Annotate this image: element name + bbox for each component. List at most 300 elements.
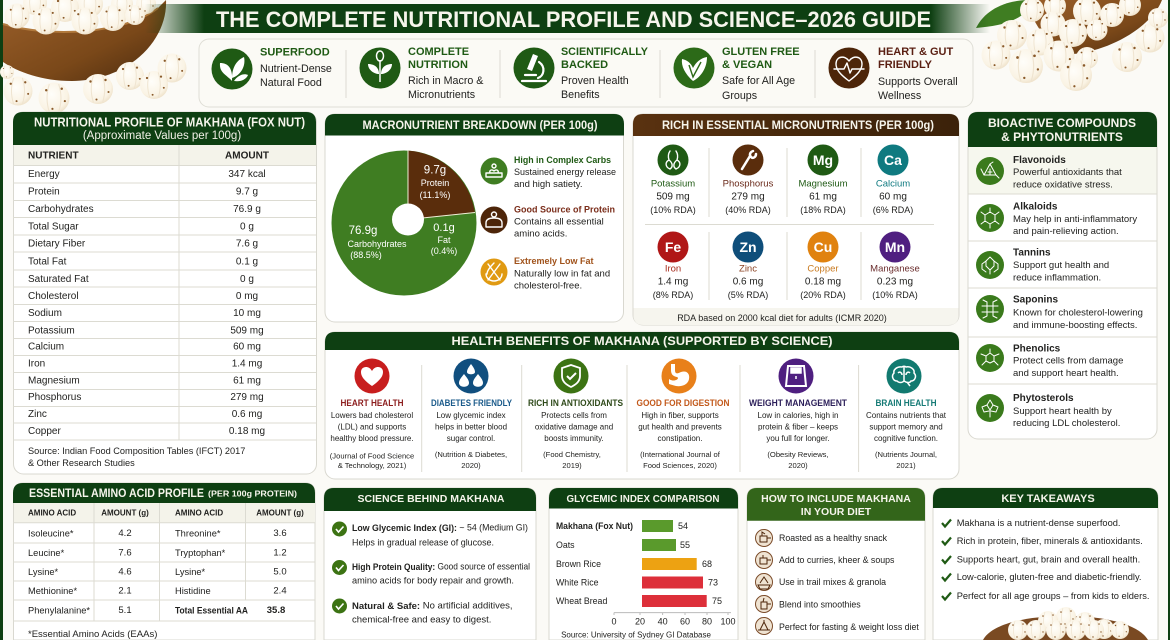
benefit: weight management: protein & fiber – keeps [758,422,838,432]
text: gluten free [722,46,800,102]
benefit: weight management: Low in calories, high in [758,411,838,420]
table rows: Total Fat [28,256,67,268]
nutrient: calcium: 60 mg [879,192,907,202]
amino table rows: 7.6 [118,548,132,558]
item: roasted snack [756,530,888,546]
nutrient: phosphorus: (40% RDA) [725,205,771,215]
chart: glycemic index bars: 20 [635,616,645,626]
item: smoothies: Blend into smoothies [779,600,861,610]
nutrient: manganese: 0.23 mg [877,276,913,288]
table rows: Saturated Fat [28,274,89,285]
table rows: Carbohydrates [28,204,94,215]
table rows: 61 mg [233,376,261,386]
table rows: 0.18 mg [229,426,265,437]
benefit: diabetes friendly [431,358,512,470]
benefit: antioxidants: RICH IN ANTIOXIDANTS [528,398,623,408]
benefit: weight management: 2020) [788,461,808,470]
nutrient: copper [800,232,846,300]
nutrient: manganese: Mn [885,239,905,255]
nutrient: magnesium: (18% RDA) [800,205,846,215]
table rows: Energy [28,169,60,180]
chart: macronutrient pie: (11.1%) [420,190,450,200]
takeaway list: Supports heart, gut, brain and overall health. [957,554,1140,564]
table rows: Iron [28,358,45,370]
compound: flavonoids: reduce oxidative stress. [1013,180,1113,190]
chart: glycemic index bars: 75 [712,596,722,606]
text: superfood [260,46,332,89]
benefit: diabetes friendly: Low glycemic index [436,411,506,420]
benefit: heart health: HEART HEALTH [340,398,404,408]
amino table rows: Leucine* [28,548,65,558]
compound: phenolics [976,344,1123,379]
feature strip [199,39,973,107]
benefit: brain health: support memory and [869,422,943,432]
heading: macronutrient breakdown: MACRONUTRIENT BREAKDOWN (PER 100g) [362,118,598,132]
text: scientifically backed: BACKED [561,59,608,71]
table rows: 7.6 g [236,238,258,250]
heading: science behind makhana: SCIENCE BEHIND MAKHANA [357,493,505,505]
callout: complex carbs: Sustained energy release [514,167,616,178]
callout: source of protein: amino acids. [514,228,567,240]
nutrient: calcium: Ca [884,152,902,168]
chart: glycemic index bars: 0 [611,616,617,626]
amino table rows: AMINO ACID [28,508,76,518]
takeaway list: Makhana is a nutrient-dense superfood. [957,518,1121,528]
nutrient: magnesium: Magnesium [798,178,848,190]
item: smoothies [756,596,861,612]
text: complete nutrition: COMPLETE [408,46,469,58]
text: gluten free: & VEGAN [722,59,772,71]
heading: glycemic index [549,488,738,508]
compound: phytosterols: reducing LDL cholesterol. [1013,418,1120,429]
chart source: Source: University of Sydney GI Database [561,630,711,640]
icon: heart and pulse [828,48,870,88]
takeaway list: Perfect for all age groups – from kids to elders. [957,591,1149,601]
title banner: THE COMPLETE NUTRITIONAL PROFILE AND SCIENCE–2026 GUIDE [216,7,931,32]
point: natural and safe [332,598,513,626]
compound: alkaloids: Alkaloids [1013,202,1058,212]
table rows: Copper [28,426,61,437]
panel: micronutrients [633,114,959,325]
compound: saponins: Saponins [1013,294,1058,306]
nutrient: iron: Iron [665,264,681,274]
compound: flavonoids [976,155,1122,190]
compound: saponins: Known for cholesterol-lowering [1013,308,1143,318]
heading: bioactive compounds: BIOACTIVE COMPOUNDS [988,116,1136,130]
chart: glycemic index bars: 73 [708,578,718,588]
table rows: 279 mg [230,392,264,403]
compound: tannins: Tannins [1013,248,1051,258]
table rows: Magnesium [28,376,80,386]
compound: phytosterols: Phytosterols [1013,393,1074,404]
benefit: digestion: gut health and prevents [638,422,722,432]
compound: phenolics: and support heart health. [1013,368,1119,379]
benefit: digestion [636,358,730,470]
benefit: brain health: (Nutrients Journal, [875,450,937,459]
heading: micronutrients: RICH IN ESSENTIAL MICRONUTRIENTS (PER 100g) [662,118,934,132]
takeaway list: Rich in protein, fiber, minerals & antioxidants. [957,536,1143,546]
nutrient: copper: Copper [807,264,839,274]
heading: amino acid profile: ESSENTIAL AMINO ACID PROFILE [29,486,204,500]
text: heart and gut [878,46,958,102]
heading: key takeaways [933,488,1158,508]
table source note [28,446,245,468]
table rows: 60 mg [233,342,261,352]
icon: microscope [514,48,554,88]
amino table rows: Tryptophan* [175,548,226,558]
chart: macronutrient pie: Protein [421,178,449,188]
photo: bowl of makhana, top left [0,0,187,114]
chart: glycemic index bars: 100 [720,616,736,626]
chart: glycemic index bars: 54 [678,521,688,531]
nutrient: zinc: Zinc [739,264,757,274]
nutrient: calcium [873,144,913,215]
point: high protein quality: High Protein Quality: Good source of essential [352,562,530,572]
chart: macronutrient pie [332,150,476,296]
table source note: Source: Indian Food Composition Tables (IFCT) 2017 [28,446,245,456]
nutrient: calcium: (6% RDA) [873,205,913,215]
amino table rows [28,508,304,616]
takeaway list: Low-calorie, gluten-free and diabetic-friendly. [957,572,1142,582]
chart: glycemic index bars: 80 [702,616,712,626]
benefit: heart health: (Journal of Food Science [330,452,414,460]
callout: source of protein [480,204,615,240]
text: scientifically backed: Proven Health [561,75,629,87]
heading: glycemic index: GLYCEMIC INDEX COMPARISON [566,493,720,505]
amino table rows: Lysine* [175,567,206,577]
chart: glycemic index bars [556,520,736,626]
table rows: Dietary Fiber [28,238,86,250]
panel: science behind makhana [324,488,536,640]
nutrient: manganese [870,232,920,300]
benefit: antioxidants: (Food Chemistry, [543,450,601,459]
nutrient: iron: (8% RDA) [653,290,693,300]
point: high protein quality: amino acids for body repair and growth. [352,576,514,586]
nutrient: iron [653,232,693,300]
text: scientifically backed: SCIENTIFICALLY [561,46,649,58]
heading: bioactive compounds [968,112,1157,147]
item: curries: Add to curries, kheer & soups [779,555,895,565]
heading: micronutrients [633,114,959,136]
chart: macronutrient pie: Carbohydrates [347,239,407,249]
text: heart and gut: Wellness [878,90,921,102]
panel: bioactive compounds [968,112,1157,439]
compound: phenolics: Phenolics [1013,344,1061,354]
amino table rows: 2.4 [273,586,287,596]
nutrient: zinc [728,232,768,300]
heading: nutritional profile: NUTRITIONAL PROFILE OF MAKHANA (FOX NUT) [34,114,305,130]
amino table footnote: *Essential Amino Acids (EAAs) [28,629,157,640]
micronutrient footnote: RDA based on 2000 kcal diet for adults (ICMR 2020) [677,313,887,323]
compound: flavonoids: Flavonoids [1013,155,1066,166]
point: natural and safe: Natural & Safe: No artificial additives, [352,600,513,612]
benefit: heart health: & Technology, 2021) [338,461,407,470]
heading: how to include [747,488,925,521]
photo: bowl of makhana, bottom right [983,607,1148,640]
heading: key takeaways: KEY TAKEAWAYS [1001,493,1095,505]
compound: phytosterols [976,393,1120,429]
panel: glycemic index comparison [549,488,738,640]
nutrient: potassium [650,144,696,215]
callout: source of protein: Good Source of Protein [514,204,615,214]
compound: alkaloids: May help in anti-inflammatory [1013,214,1137,225]
nutrient: potassium: Potassium [651,178,695,190]
panel: health benefits [325,332,959,479]
text: complete nutrition [408,46,483,101]
compound: saponins: and immune-boosting effects. [1013,320,1137,331]
amino table rows: 35.8 [267,605,285,616]
point: natural and safe: chemical-free and easy to digest. [352,614,491,626]
nutrient: phosphorus: Phosphorus [723,178,774,190]
amino table rows: 5.1 [118,605,132,616]
benefit: heart health [330,358,414,470]
item: fasting [756,618,919,634]
callout: low fat: cholesterol-free. [514,280,582,292]
table rows: 0 mg [236,291,258,302]
nutrient: magnesium [798,144,848,215]
nutrient: iron: 1.4 mg [658,276,688,288]
benefit: weight management: you full for longer. [766,434,830,443]
table header: NUTRIENT [28,150,79,162]
callout: low fat: Extremely Low Fat [514,256,594,266]
amino table rows: Histidine [175,586,211,596]
benefit: brain health: BRAIN HEALTH [876,398,936,408]
benefit: weight management: WEIGHT MANAGEMENT [749,398,847,408]
nutrient: copper: 0.18 mg [805,276,841,288]
text: gluten free: GLUTEN FREE [722,46,800,58]
amino table rows: 4.6 [118,566,132,578]
callout: complex carbs: High in Complex Carbs [514,155,611,165]
nutrient: copper: (20% RDA) [800,290,846,300]
table rows: Sodium [28,308,62,319]
text: complete nutrition: NUTRITION [408,59,468,71]
nutrient: copper: Cu [814,239,832,255]
chart: glycemic index bars: 40 [658,616,668,626]
heading: bioactive compounds: & PHYTONUTRIENTS [1001,130,1123,144]
callout: complex carbs [480,155,616,190]
text: superfood: SUPERFOOD [260,46,330,58]
chart: glycemic index bars: 55 [680,540,690,550]
heading: nutritional profile: (Approximate Values per 100g) [83,130,241,142]
point: high protein quality [332,560,530,586]
benefit: digestion: (International Journal of [640,450,721,459]
benefit: antioxidants: boosts immunity. [544,434,604,443]
benefit: diabetes friendly: (Nutrition & Diabetes, [435,450,507,459]
table header: AMOUNT [225,150,269,162]
heading: amino acid profile: (PER 100g PROTEIN) [208,488,297,498]
nutrient: manganese: (10% RDA) [872,290,918,300]
chart: macronutrient pie: 76.9g [349,225,377,237]
benefit: heart health: Lowers bad cholesterol [331,411,413,420]
point: low glycemic index: Low Glycemic Index (GI): ~ 54 (Medium GI) [352,522,528,534]
nutrient: iron: Fe [665,239,681,255]
amino table rows: 5.0 [273,566,287,578]
nutrient: zinc: (5% RDA) [728,290,768,300]
heading: health benefits [325,332,959,350]
benefit: diabetes friendly: DIABETES FRIENDLY [431,398,512,408]
table rows: 9.7 g [236,186,258,198]
compound: tannins: Support gut health and [1013,260,1109,271]
amino table rows: Isoleucine* [28,528,74,538]
point: low glycemic index: Helps in gradual release of glucose. [352,538,494,548]
chart: glycemic index bars: Wheat Bread [556,596,607,606]
table rows: 509 mg [230,326,264,336]
table rows: 0 g [240,222,254,232]
amino table rows: AMOUNT (g) [256,508,304,518]
chart: macronutrient pie: Fat [437,235,451,245]
amino table rows: Threonine* [175,528,221,538]
panel: key takeaways [933,488,1158,640]
nutrient: phosphorus: 279 mg [731,192,765,202]
nutrient: manganese: Manganese [870,264,920,274]
chart: glycemic index bars: Oats [556,540,575,550]
nutrient: potassium: 509 mg [656,192,690,202]
table rows: Phosphorus [28,392,81,403]
panel: amino acid table [13,483,315,640]
amino table rows: 4.2 [118,528,132,539]
compound: alkaloids: and pain-relieving action. [1013,226,1119,237]
benefit: digestion: Food Sciences, 2020) [643,461,717,470]
compound: phenolics: Protect cells from damage [1013,356,1123,366]
benefit: weight management: (Obesity Reviews, [767,450,829,459]
benefit: heart health: (LDL) and supports [338,422,406,432]
text: complete nutrition: Micronutrients [408,89,475,101]
text: complete nutrition: Rich in Macro & [408,75,483,87]
benefit: brain health: Contains nutrients that [866,411,947,420]
table rows: Protein [28,186,60,198]
benefit: antioxidants [528,358,623,470]
chart: macronutrient pie: 0.1g [433,222,455,234]
table rows: Total Sugar [28,222,79,232]
heading: science behind makhana [324,488,536,511]
nutrient: magnesium: 61 mg [809,192,837,202]
icon: complete nutrition sprout [360,48,400,88]
icon: gluten free leaf [674,48,714,88]
table rows: 76.9 g [233,204,261,215]
chart: glycemic index bars: Makhana (Fox Nut) [556,521,633,531]
table rows: Zinc [28,409,47,420]
text: heart and gut: Supports Overall [878,76,958,88]
icon: superfood leaves [212,48,252,90]
compound: saponins [976,294,1143,331]
nutrient: potassium: (10% RDA) [650,205,696,215]
chart: macronutrient pie: (88.5%) [350,250,382,260]
benefit: antioxidants: 2019) [562,461,582,470]
table rows: 0.6 mg [232,409,262,420]
nutrient: magnesium: Mg [813,152,833,168]
panel: nutritional profile table [13,112,316,474]
chart: glycemic index bars: White Rice [556,578,599,588]
chart: glycemic index bars: 68 [702,559,712,569]
amino table rows: Phenylalanine* [28,606,90,616]
text: heart and gut: FRIENDLY [878,59,933,71]
table rows: Potassium [28,326,75,336]
item: curries [756,552,895,568]
heading: how to include: HOW TO INCLUDE MAKHANA [761,493,911,505]
table rows: 0.1 g [236,256,258,268]
heading: macronutrient breakdown [325,114,624,136]
compound: phytosterols: Support heart health by [1013,406,1112,417]
chart: macronutrient pie: 9.7g [424,164,446,176]
callout: low fat: Naturally low in fat and [514,268,610,280]
nutrient: phosphorus [723,144,774,215]
benefit: antioxidants: oxidative damage and [535,422,613,432]
compound: tannins: reduce inflammation. [1013,272,1101,284]
table rows: 10 mg [233,308,261,319]
callout: low fat [480,256,610,292]
panel: macronutrient breakdown [325,114,624,322]
callout: complex carbs: and high satiety. [514,179,582,190]
amino table rows: Total Essential AA [175,606,248,616]
amino table rows: Methionine* [28,586,77,596]
benefit: brain health: cognitive function. [874,434,938,443]
benefit: heart health: healthy blood pressure. [330,434,414,443]
takeaway list [942,518,1149,601]
table rows: 1.4 mg [232,358,262,370]
benefit: brain health [866,358,947,470]
heading: nutritional profile [13,112,316,145]
panel: how to include makhana [747,488,925,640]
text: gluten free: Safe for All Age [722,75,795,87]
text: scientifically backed: Benefits [561,89,600,101]
compound: tannins [976,248,1109,284]
compound: flavonoids: Powerful antioxidants that [1013,167,1122,178]
text: superfood: Nutrient-Dense [260,63,332,75]
chart: macronutrient pie: (0.4%) [431,246,457,256]
item: trail mix: Use in trail mixes & granola [779,577,886,587]
table rows: 0 g [240,274,254,285]
amino table rows: 2.1 [118,586,132,596]
callout: source of protein: Contains all essential [514,216,604,228]
benefit: antioxidants: Protects cells from [541,411,607,420]
item: roasted snack: Roasted as a healthy snack [779,533,888,543]
benefit: brain health: 2021) [896,461,916,470]
table source note: & Other Research Studies [28,458,135,468]
item: fasting: Perfect for fasting & weight loss diet [779,622,919,632]
heading: how to include: IN YOUR DIET [801,506,872,518]
heading: health benefits: HEALTH BENEFITS OF MAKHANA (SUPPORTED BY SCIENCE) [452,334,832,348]
benefit: weight management [749,358,847,470]
photo: spilled makhana with leaf, top right [976,0,1168,91]
nutrient: zinc: Zn [739,239,757,255]
point: low glycemic index [332,522,528,548]
micronutrient footnote [634,308,958,325]
benefit: diabetes friendly: helps in better blood [435,422,507,432]
benefit: diabetes friendly: 2020) [461,461,481,470]
amino table rows: AMINO ACID [175,508,223,518]
table rows [28,169,266,437]
table rows: Cholesterol [28,291,79,302]
amino table rows: AMOUNT (g) [101,508,149,518]
text: heart and gut: HEART & GUT [878,46,953,58]
table rows: Calcium [28,342,64,352]
benefit: digestion: High in fiber, supports [641,411,719,420]
amino table rows: 3.6 [273,528,287,539]
benefit: digestion: constipation. [658,434,702,443]
text: superfood: Natural Food [260,77,322,89]
amino table rows: Lysine* [28,567,59,577]
text: scientifically backed [561,46,649,101]
nutrient: zinc: 0.6 mg [733,276,763,288]
heading: amino acid profile [13,483,315,503]
amino table rows: 1.2 [273,548,287,558]
table header [14,145,316,166]
chart: glycemic index bars: Brown Rice [556,559,601,569]
table rows: 347 kcal [228,169,266,180]
chart: glycemic index bars: 60 [680,616,690,626]
benefit: digestion: GOOD FOR DIGESTION [636,398,730,408]
item: trail mix [756,574,886,590]
